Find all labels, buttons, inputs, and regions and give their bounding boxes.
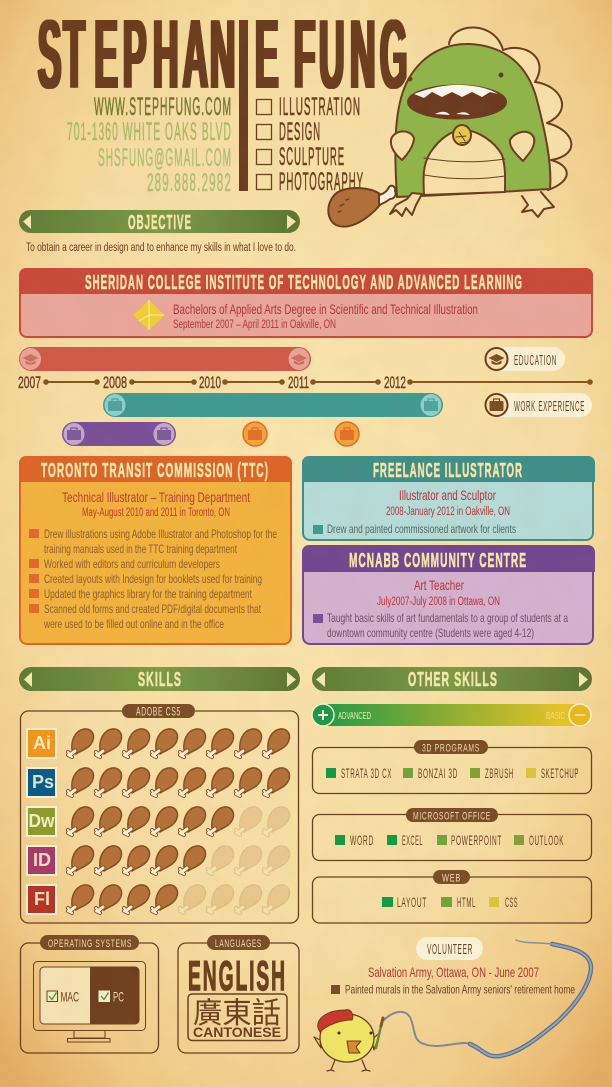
timeline: axis with years: 2007 bbox=[18, 373, 41, 392]
icon: monitor bbox=[34, 962, 146, 1042]
legend: advanced to basic scale bbox=[312, 704, 591, 726]
panel: Freelance Illustrator: Drew and painted commissioned artwork for clients bbox=[327, 522, 516, 536]
duty list: Scanned old forms and created PDF/digital documents that bbox=[44, 602, 261, 616]
panel: languages: LANGUAGES bbox=[215, 938, 262, 950]
heading: skills: SKILLS bbox=[138, 669, 182, 691]
panel: languages: CANTONESE bbox=[193, 1025, 281, 1040]
heading: other skills: OTHER SKILLS bbox=[408, 669, 498, 691]
title: STEPHANIE FUNG bbox=[36, 0, 406, 109]
icon: green monster with drumstick bbox=[328, 27, 571, 227]
icon: Photoshop bbox=[27, 768, 56, 797]
duty list: Created layouts with Indesign for booklets used for training bbox=[44, 572, 262, 586]
panel: McNabb Community Centre bbox=[302, 545, 595, 644]
panel: Web: LAYOUT bbox=[397, 894, 427, 910]
timeline: community centre bar bbox=[62, 422, 176, 446]
volunteer text: Salvation Army, Ottawa, ON - June 2007 bbox=[368, 964, 539, 980]
rating row: Photoshop bbox=[68, 768, 290, 796]
objective text: To obtain a career in design and to enhance my skills in what I love to do. bbox=[26, 242, 296, 254]
panel: Adobe CS5 skills: ADOBE CS5 bbox=[136, 704, 181, 718]
panel: McNabb Community Centre: July2007-July 2008 in Ottawa, ON bbox=[377, 596, 500, 608]
icon: Sheridan logo bbox=[133, 300, 164, 330]
panel: languages bbox=[178, 935, 299, 1053]
panel: Freelance Illustrator bbox=[302, 456, 595, 540]
heading: skills bbox=[19, 667, 300, 691]
timeline: axis with years: 2011 bbox=[288, 373, 309, 392]
timeline: education bar bbox=[19, 347, 311, 371]
panel: Freelance Illustrator: 2008-January 2012 in Oakville, ON bbox=[386, 506, 510, 518]
timeline: axis with years bbox=[18, 373, 593, 392]
panel: Sheridan education bbox=[19, 268, 593, 337]
text: PHOTOGRAPHY bbox=[279, 168, 364, 196]
icon: Flash: Fl bbox=[34, 889, 50, 909]
panel: Microsoft Office: MICROSOFT OFFICE bbox=[413, 810, 491, 822]
text: SHSFUNG@GMAIL.COM bbox=[98, 144, 232, 172]
panel: Web: WEB bbox=[442, 872, 461, 884]
duty list bbox=[43, 527, 277, 631]
icon: Illustrator: Ai bbox=[33, 733, 51, 753]
volunteer heading bbox=[416, 937, 483, 960]
timeline: axis with years: 2012 bbox=[384, 373, 406, 392]
panel: languages: ENGLISH bbox=[188, 952, 287, 999]
panel: languages: 廣東話 bbox=[193, 990, 281, 1032]
panel: Web bbox=[312, 870, 592, 923]
duty list: Drew illustrations using Adobe Illustrator and Photoshop for the bbox=[44, 527, 277, 541]
icon: Photoshop: Ps bbox=[32, 772, 54, 792]
icon: Flash bbox=[27, 885, 56, 914]
panel: Toronto Transit Commission: May-August 2010 and 2011 in Toronto, ON bbox=[82, 507, 230, 519]
heading: objective bbox=[19, 210, 300, 234]
panel: Microsoft Office: POWERPOINT bbox=[451, 832, 502, 848]
panel: 3D programs: STRATA 3D CX bbox=[341, 765, 392, 781]
panel: Microsoft Office: OUTLOOK bbox=[529, 832, 564, 848]
legend: education: EDUCATION bbox=[514, 352, 557, 369]
duty list: Worked with editors and curriculum developers bbox=[44, 557, 220, 571]
icon: Dreamweaver bbox=[27, 807, 56, 836]
panel: Sheridan education: September 2007 – April 2011 in Oakville, ON bbox=[173, 319, 336, 331]
panel: Microsoft Office: EXCEL bbox=[402, 832, 423, 848]
panel: McNabb Community Centre: Art Teacher bbox=[414, 577, 464, 593]
panel: Freelance Illustrator: Illustrator and Sculptor bbox=[399, 487, 496, 503]
panel: operating systems: PC bbox=[113, 988, 124, 1004]
rating row: Illustrator bbox=[68, 729, 290, 757]
panel: Toronto Transit Commission: TORONTO TRANSIT COMMISSION (TTC) bbox=[41, 460, 269, 482]
legend: advanced to basic scale: ADVANCED bbox=[338, 711, 371, 722]
heading: objective: OBJECTIVE bbox=[128, 212, 192, 234]
panel: operating systems: MAC bbox=[60, 988, 79, 1004]
panel: 3D programs: ZBRUSH bbox=[485, 765, 514, 781]
timeline: axis with years: 2008 bbox=[103, 373, 127, 392]
legend: education bbox=[486, 347, 565, 371]
panel: Toronto Transit Commission bbox=[19, 456, 292, 644]
legend: work experience bbox=[486, 393, 592, 417]
paint brush stroke bbox=[384, 940, 591, 1056]
timeline: axis with years: 2010 bbox=[199, 373, 221, 392]
panel: Adobe CS5 skills bbox=[20, 704, 298, 923]
panel: Web: HTML bbox=[457, 894, 476, 910]
text: 701-1360 WHITE OAKS BLVD bbox=[67, 118, 232, 146]
contact details bbox=[67, 93, 232, 197]
icon: Dreamweaver: Dw bbox=[28, 811, 55, 831]
text: 289.888.2982 bbox=[147, 169, 232, 197]
disciplines checklist: DESIGN bbox=[279, 118, 321, 146]
icon: Illustrator bbox=[27, 729, 56, 758]
disciplines checklist bbox=[256, 93, 364, 196]
rating row: InDesign bbox=[68, 846, 290, 874]
duty list: training manuals used in the TTC training department bbox=[44, 542, 237, 556]
legend: advanced to basic scale: BASIC bbox=[546, 711, 565, 722]
volunteer heading: VOLUNTEER bbox=[427, 941, 473, 958]
panel: Web: CSS bbox=[505, 894, 518, 910]
icon: chick with beret and brush bbox=[314, 1010, 383, 1071]
panel: operating systems bbox=[20, 935, 158, 1053]
text: SCULPTURE bbox=[279, 143, 345, 171]
heading: other skills bbox=[312, 667, 592, 691]
rating row: Dreamweaver bbox=[68, 807, 290, 835]
timeline: TTC markers bbox=[243, 422, 359, 446]
duty bullets bbox=[29, 529, 39, 613]
panel: Sheridan education: Bachelors of Applied Arts Degree in Scientific and Technical Illustration bbox=[173, 301, 478, 317]
title bbox=[36, 0, 409, 191]
icon: InDesign: ID bbox=[33, 850, 51, 870]
rating row: Flash bbox=[68, 885, 290, 913]
icon: InDesign bbox=[27, 846, 56, 875]
panel: 3D programs: BONZAI 3D bbox=[418, 765, 458, 781]
duty list: Updated the graphics library for the training department bbox=[44, 587, 252, 601]
panel: 3D programs: 3D PROGRAMS bbox=[422, 742, 480, 754]
panel: 3D programs bbox=[312, 740, 592, 794]
panel: operating systems: OPERATING SYSTEMS bbox=[48, 938, 132, 950]
duty list: were used to be filled out online and in the office bbox=[43, 617, 224, 631]
timeline: freelance bar bbox=[103, 393, 443, 417]
text: WWW.STEPHFUNG.COM bbox=[94, 93, 232, 121]
text: ILLUSTRATION bbox=[279, 93, 361, 121]
panel: Microsoft Office: WORD bbox=[350, 832, 374, 848]
volunteer text bbox=[331, 964, 575, 996]
panel: Microsoft Office bbox=[312, 808, 592, 860]
panel: Toronto Transit Commission: Technical Illustrator – Training Department bbox=[62, 489, 250, 505]
